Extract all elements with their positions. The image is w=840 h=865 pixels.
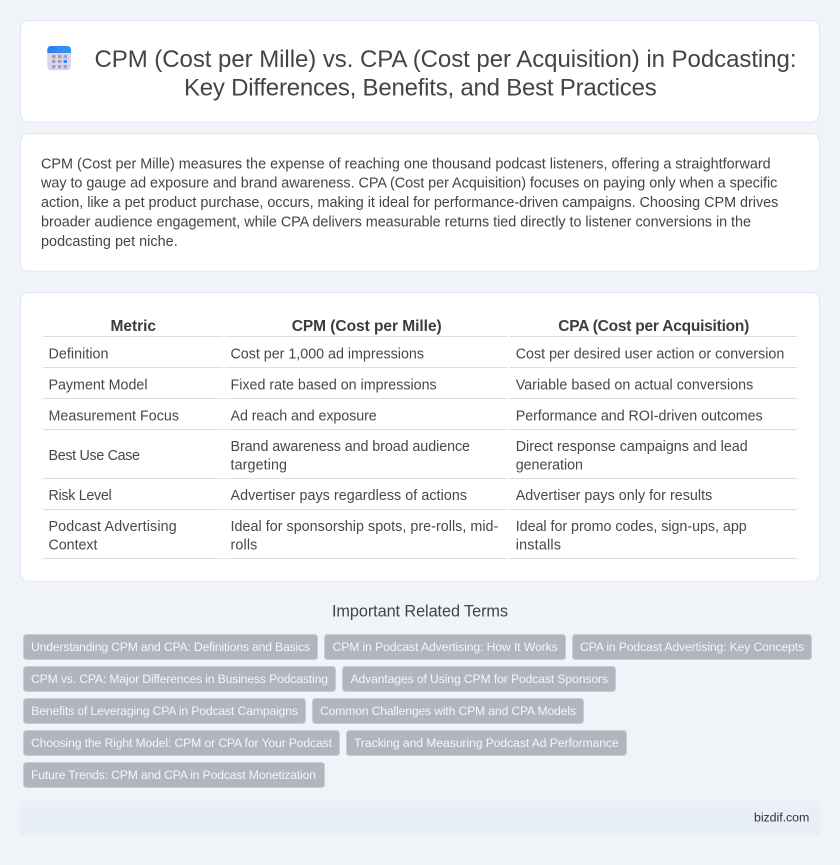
tag: advantages of CPM — [342, 666, 616, 692]
row: measurement focus: Ad reach and exposure — [230, 408, 377, 424]
row: podcast advertising context: Ideal for promo codes, sign-ups, app — [516, 519, 747, 535]
title: CPM (Cost per Mille) vs. CPA (Cost per Acquisition) in Podcasting: — [94, 46, 796, 73]
row: payment model: Variable based on actual conversions — [516, 377, 753, 393]
row: podcast advertising context: Ideal for sponsorship spots, pre-rolls, mid- — [230, 519, 499, 535]
tag: CPA in podcast advertising — [572, 634, 812, 660]
title: Key Differences, Benefits, and Best Practices — [184, 75, 657, 102]
icon: calendar — [47, 46, 71, 70]
row: payment model: Fixed rate based on impressions — [230, 377, 437, 393]
row: risk level: Advertiser pays only for results — [516, 488, 712, 504]
row: best use case — [48, 439, 748, 473]
title — [94, 46, 796, 102]
table header row: CPA (Cost per Acquisition) — [558, 318, 749, 335]
summary paragraph: broader audience engagement, while CPA delivers measurable returns tied directly to listener conversions in the — [41, 215, 751, 231]
row: podcast advertising context: installs — [516, 537, 561, 553]
heading: important related terms: Important Related Terms — [332, 603, 508, 621]
row: payment model — [48, 377, 753, 393]
tag: common challenges — [312, 698, 584, 724]
panel: header — [20, 20, 820, 122]
tag: common challenges: Common Challenges with CPM and CPA Models — [320, 704, 576, 718]
footer site name: bizdif.com — [754, 811, 809, 825]
row: risk level: Risk Level — [48, 488, 112, 504]
summary paragraph — [40, 156, 778, 250]
tag: understanding CPM and CPA: Understanding CPM and CPA: Definitions and Basics — [31, 640, 310, 654]
row: definition: Cost per desired user action or conversion — [516, 346, 784, 362]
tag: future trends: Future Trends: CPM and CPA in Podcast Monetization — [31, 768, 316, 782]
tag: choosing the right model: Choosing the Right Model: CPM or CPA for Your Podcast — [31, 736, 333, 750]
panel: comparison table — [20, 292, 820, 581]
row: best use case: Brand awareness and broad audience — [230, 439, 470, 455]
summary paragraph: way to gauge ad exposure and brand awareness. CPA (Cost per Acquisition) focuses on paying only when a specific — [40, 176, 777, 192]
tag: tracking and measuring — [346, 730, 626, 756]
tag: CPM vs. CPA differences — [24, 666, 336, 692]
row: best use case: Best Use Case — [48, 448, 140, 464]
row: measurement focus: Performance and ROI-driven outcomes — [516, 408, 763, 424]
tag: future trends — [24, 762, 324, 788]
summary paragraph: action, like a pet product purchase, occurs, making it ideal for performance-driven campaigns. Choosing CPM drives — [41, 195, 778, 211]
row: risk level: Advertiser pays regardless of actions — [230, 488, 467, 504]
table header row: Metric — [110, 318, 156, 335]
row: definition: Definition — [48, 346, 109, 362]
tag: understanding CPM and CPA — [24, 634, 318, 660]
panel: related term tags — [24, 634, 812, 788]
footer bar — [20, 801, 820, 835]
row: podcast advertising context: rolls — [230, 537, 257, 553]
table header row — [110, 318, 749, 335]
tag: CPM in podcast advertising: CPM in Podcast Advertising: How It Works — [332, 640, 558, 654]
tag: tracking and measuring: Tracking and Measuring Podcast Ad Performance — [354, 736, 619, 750]
tag: CPM in podcast advertising — [324, 634, 566, 660]
row: risk level — [48, 488, 712, 504]
row: best use case: Direct response campaigns and lead — [516, 439, 748, 455]
row: payment model: Payment Model — [48, 377, 148, 393]
tag: choosing the right model — [24, 730, 340, 756]
row: best use case: generation — [516, 457, 583, 473]
tag: advantages of CPM: Advantages of Using CPM for Podcast Sponsors — [350, 672, 608, 686]
row: measurement focus: Measurement Focus — [48, 408, 179, 424]
summary paragraph: CPM (Cost per Mille) measures the expense of reaching one thousand podcast listeners, offering a straightforward — [41, 156, 771, 172]
row: podcast advertising context: Podcast Advertising — [48, 519, 177, 535]
table header row: CPM (Cost per Mille) — [292, 318, 442, 335]
row: best use case: targeting — [230, 457, 287, 473]
tag: CPM vs. CPA differences: CPM vs. CPA: Major Differences in Business Podcasting — [31, 672, 328, 686]
tag: benefits of CPA — [24, 698, 306, 724]
row: podcast advertising context: Context — [48, 537, 98, 553]
table row dividers — [43, 336, 797, 559]
row: measurement focus — [48, 408, 763, 424]
tag: benefits of CPA: Benefits of Leveraging CPA in Podcast Campaigns — [31, 704, 298, 718]
row: definition: Cost per 1,000 ad impressions — [230, 346, 424, 362]
summary paragraph: podcasting pet niche. — [41, 234, 178, 250]
panel: summary text — [20, 134, 820, 271]
row: podcast advertising context — [48, 519, 747, 553]
row: definition — [48, 346, 784, 362]
tag: CPA in podcast advertising: CPA in Podcast Advertising: Key Concepts — [580, 640, 804, 654]
